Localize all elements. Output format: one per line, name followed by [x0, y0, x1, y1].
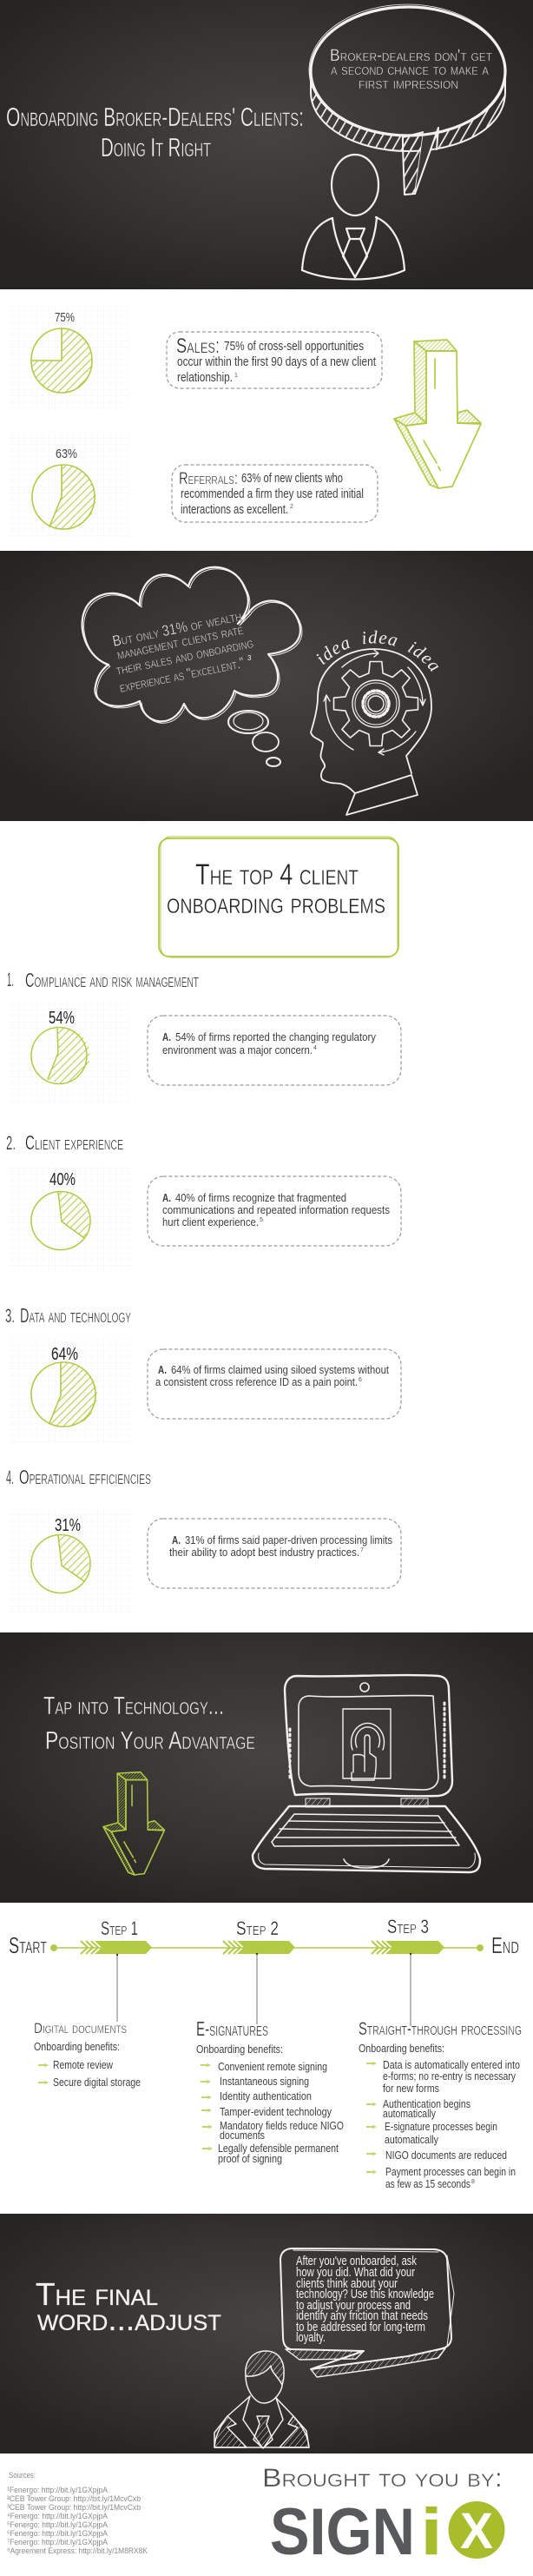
heading: tap into technology: Position Your Advantage [45, 1727, 255, 1755]
callout: A. [162, 1030, 171, 1043]
step 3 marker: Step 3 [387, 1916, 429, 1937]
pie chart: 63%: 63% [56, 447, 77, 461]
callout: 40% of firms recognize that fragmented [175, 1191, 346, 1204]
callout: referrals: 63% of new clients who [241, 472, 343, 486]
heading: 4. [6, 1467, 14, 1488]
timeline: Start [9, 1932, 47, 1958]
column: straight-through processing: automatically [385, 2133, 438, 2146]
speech box text: loyalty. [296, 2331, 326, 2345]
icon: green arrow on chalkboard [103, 1772, 164, 1875]
callout: 4 [313, 1045, 317, 1051]
column: digital documents: Secure digital storage [53, 2076, 141, 2089]
column: e-signatures: Tamper-evident technology [220, 2105, 332, 2118]
callout: referrals: Referrals: [179, 470, 238, 488]
speech bubble text: a second chance to make a [331, 61, 489, 79]
thought cloud text: But only 31% of wealth [111, 606, 243, 650]
heading box: top 4 client onboarding problems: onboarding problems [167, 887, 385, 920]
pie chart: 40%: 40% [49, 1170, 76, 1189]
panel: thought cloud chalkboard [0, 551, 533, 821]
pie chart: 64%: 64% [51, 1345, 78, 1364]
column: straight-through processing: automatically [383, 2107, 436, 2120]
callout: referrals: interactions as excellent. [181, 503, 288, 517]
column: straight-through processing: E-signature processes begin [385, 2120, 497, 2133]
sources list: ⁶Fenergo: http://bit.ly/1GXpjpA [7, 2529, 109, 2539]
icon: speech box [280, 2248, 454, 2377]
column: e-signatures: Onboarding benefits: [196, 2043, 283, 2056]
thought cloud text: their sales and onboarding [115, 633, 255, 679]
heading: the final word adjust: The final [36, 2276, 158, 2312]
column: e-signatures: E-signatures [196, 2017, 268, 2040]
speech box text: technology? Use this knowledge [296, 2288, 434, 2301]
callout: sales: Sales: [176, 334, 220, 358]
icon: green arrow [394, 340, 481, 488]
column: digital documents: Remote review [53, 2058, 113, 2071]
sources list: ⁸Agreement Express: http://bit.ly/1M8RX8K [7, 2546, 148, 2556]
idea text: idea idea idea [316, 631, 439, 672]
column: e-signatures: Mandatory fields reduce NIGO [220, 2119, 344, 2132]
callout: referrals: 2 [290, 504, 293, 510]
pie chart: 31%: 31% [55, 1516, 81, 1535]
heading: 1. [7, 969, 14, 990]
callout: 5 [260, 1217, 263, 1223]
tablet and tap gesture [343, 1709, 391, 1780]
callout: 6 [359, 1377, 362, 1383]
logo: SIGNiX: i [420, 2495, 443, 2569]
panel: top 4 problems [0, 821, 533, 1632]
laptop screen [285, 1675, 452, 1796]
column: straight-through processing: 8 [471, 2179, 475, 2185]
title: Doing It Right [101, 132, 211, 162]
speech bubble text [330, 47, 492, 93]
heading: Client experience [25, 1131, 123, 1154]
callout: sales: 75% of cross-sell opportunities [224, 340, 364, 354]
title [6, 102, 304, 162]
speech box text: to be addressed for long-term [296, 2321, 425, 2334]
hinges [306, 1798, 428, 1807]
column: e-signatures: Instantaneous signing [220, 2075, 309, 2088]
speech box text: After you've onboarded, ask [296, 2255, 418, 2268]
pie chart: 54% [7, 1001, 129, 1103]
callout: their ability to adopt best industry practices. [169, 1546, 359, 1559]
callout: 54% of firms reported the changing regulatory [175, 1030, 376, 1043]
laptop base [253, 1806, 480, 1872]
callout: sales: 1 [234, 373, 238, 379]
thought cloud text: 3 [247, 654, 252, 662]
column: straight-through processing: for new forms [383, 2082, 439, 2095]
problem 4: operational efficiencies [6, 1466, 401, 1612]
heading: Data and technology [20, 1304, 131, 1327]
icon: speech bubble [309, 4, 505, 195]
timeline [9, 1916, 519, 2026]
logo: SIGNiX: SIGN [270, 2495, 415, 2569]
problem 1: compliance [7, 969, 401, 1103]
icon: businessman [302, 155, 405, 280]
callout: sales: occur within the first 90 days of a new client [177, 355, 376, 369]
step 2 marker: Step 2 [236, 1917, 279, 1939]
step 2 marker [223, 1917, 295, 1954]
callout: 64% of firms claimed using siloed systems without [171, 1363, 389, 1376]
column: e-signatures: Identity authentication [220, 2089, 312, 2103]
pie chart: 63% [7, 433, 129, 536]
callout: sales [167, 332, 382, 388]
step 1 marker: Step 1 [101, 1917, 138, 1939]
callout: referrals [172, 465, 378, 522]
callout: 31% of firms said paper-driven processing limits [185, 1533, 392, 1546]
column: straight-through processing: NIGO documents are reduced [385, 2149, 507, 2162]
column: straight-through processing: as few as 15 seconds [385, 2177, 470, 2190]
callout: A. [162, 1191, 171, 1204]
column: digital documents: Onboarding benefits: [34, 2040, 120, 2053]
speech bubble text: Broker-dealers don't get [330, 47, 492, 65]
pie chart: 75% [7, 306, 129, 410]
icon: thought cloud [82, 567, 302, 766]
callout: a consistent cross reference ID as a pain point. [155, 1375, 358, 1388]
callout: referrals: recommended a firm they use rated initial [181, 487, 364, 501]
column: e-signatures: proof of signing [218, 2152, 282, 2165]
panel: sources and sponsor [0, 2453, 533, 2576]
pie chart: 31% [8, 1509, 131, 1612]
pie chart: 64% [8, 1339, 131, 1442]
thought cloud text: management clients rate [115, 620, 245, 663]
step 3 marker [372, 1916, 444, 1954]
thought cloud text: experience as "excellent." [118, 653, 246, 696]
callout [148, 1519, 401, 1588]
heading: the final word adjust [36, 2276, 221, 2337]
column: e-signatures: Legally defensible permanent [218, 2142, 339, 2155]
panel: three step process timeline [0, 1903, 533, 2214]
callout: sales: relationship. [177, 371, 233, 385]
callout: environment was a major concern. [162, 1043, 313, 1056]
icon: laptop with touch screen [253, 1675, 480, 1872]
pie chart: 75%: 75% [55, 310, 75, 325]
column: digital documents [34, 2020, 141, 2089]
column: e-signatures: documents [220, 2129, 265, 2142]
heading: the final word adjust: word...adjust [37, 2301, 221, 2337]
speech bubble text: first impression [359, 75, 458, 93]
sources list: ⁷Fenergo: http://bit.ly/1GXpjpA [7, 2538, 109, 2547]
sources list: ⁵Fenergo: http://bit.ly/1GXpjpA [7, 2520, 109, 2530]
callout: communications and repeated information requests [162, 1203, 390, 1216]
callout [148, 1176, 401, 1246]
heading: 2. [6, 1132, 16, 1154]
heading box: top 4 client onboarding problems [159, 837, 398, 957]
gear [333, 662, 418, 745]
column: e-signatures: Convenient remote signing [218, 2060, 327, 2073]
heading box: top 4 client onboarding problems: The top 4 client [195, 858, 359, 891]
heading: tap into technology [43, 1692, 255, 1755]
heading: tap into technology: Tap into Technology... [43, 1692, 224, 1720]
panel: sales and referrals statistics [0, 289, 533, 551]
speech box text: how you did. What did your [296, 2266, 415, 2280]
sources list: Sources: [9, 2471, 36, 2480]
step 1 marker [81, 1917, 152, 1954]
logo: SIGNiX [270, 2495, 505, 2569]
sources list: ¹Fenergo: http://bit.ly/1GXpjpA [7, 2486, 109, 2495]
callout: A. [172, 1533, 181, 1546]
callout: 7 [360, 1547, 364, 1553]
callout: A. [158, 1363, 167, 1376]
icon: businessman with tie [214, 2351, 309, 2448]
speech box text: clients think about your [296, 2277, 398, 2291]
sources list: ⁴Fenergo: http://bit.ly/1GXpjpA [7, 2512, 109, 2521]
panel: header chalkboard [0, 0, 533, 289]
sources list: ²CEB Tower Group: http://bit.ly/1McvCxb [7, 2494, 141, 2504]
heading: Operational efficiencies [19, 1466, 151, 1488]
column: digital documents: Digital documents [34, 2020, 127, 2036]
pie chart: 40% [8, 1167, 131, 1271]
column: e-signatures [196, 2017, 344, 2165]
speech box text: identify any friction that needs [296, 2309, 428, 2323]
column: straight-through processing [359, 2019, 522, 2190]
heading [6, 1466, 151, 1488]
heading [7, 969, 199, 991]
sources list [7, 2471, 148, 2556]
timeline: End [491, 1932, 519, 1958]
callout [148, 1016, 401, 1085]
heading: brought to you by: Brought to you by: [262, 2464, 503, 2493]
heading [5, 1304, 131, 1327]
panel: final word chalkboard [0, 2214, 533, 2453]
title: Onboarding Broker-Dealers' Clients: [6, 102, 304, 132]
problem 3: data and technology [5, 1304, 401, 1442]
thought cloud text [111, 606, 255, 696]
heading [6, 1131, 123, 1154]
icon: head with gear [310, 631, 439, 816]
heading: Compliance and risk management [25, 969, 199, 991]
rotation arrows [342, 650, 378, 667]
heading: 3. [5, 1305, 15, 1327]
column: straight-through processing: Authentication begins [383, 2097, 470, 2110]
logo: SIGNiX: X [460, 2503, 493, 2559]
sources list: ³CEB Tower Group: http://bit.ly/1McvCxb [7, 2503, 141, 2513]
pie chart: 54%: 54% [49, 1009, 75, 1028]
speech box text [296, 2255, 434, 2345]
callout: hurt client experience. [162, 1215, 259, 1228]
panel: technology chalkboard [0, 1632, 533, 1903]
column: straight-through processing: Onboarding benefits: [359, 2042, 444, 2055]
callout [148, 1349, 401, 1419]
problem 2: client experience [6, 1131, 401, 1271]
speech box text: to adjust your process and [296, 2299, 411, 2313]
